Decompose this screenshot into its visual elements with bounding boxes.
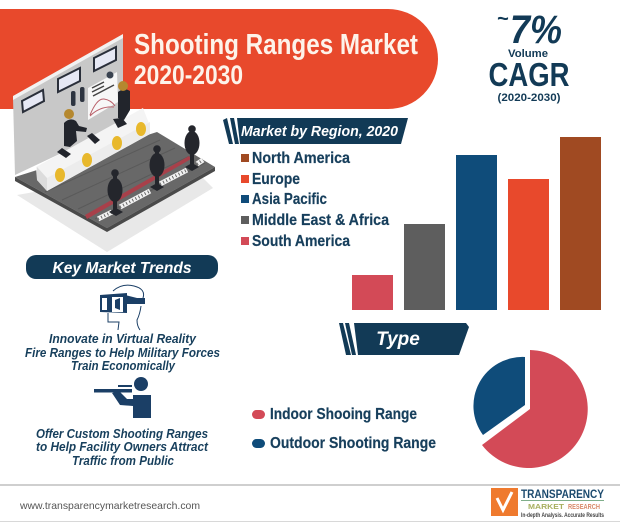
CAGR callout: 7% — [510, 8, 562, 52]
region legend: North America — [252, 150, 350, 167]
type legend — [252, 406, 436, 452]
footer rule — [0, 484, 620, 486]
type legend: Indoor Shooing Range — [270, 406, 417, 423]
text: virtual reality trend: Train Economically — [71, 359, 176, 373]
region legend: South America — [252, 233, 350, 250]
logo: transparency market research: RESEARCH — [568, 502, 600, 511]
CAGR callout: Volume — [508, 48, 548, 60]
title: Shooting Ranges Market — [134, 29, 418, 61]
CAGR callout: CAGR — [488, 56, 570, 93]
type legend: Outdoor Shooting Range — [270, 435, 436, 452]
CAGR callout — [488, 8, 570, 104]
region legend: Asia Pacific — [252, 191, 327, 208]
icon: VR headset — [100, 285, 145, 330]
logo: transparency market research: In-depth Analysis. Accurate Results — [521, 513, 605, 519]
icon: shooter with rifle — [94, 377, 151, 418]
region legend: Europe — [252, 171, 300, 188]
CAGR callout: (2020-2030) — [498, 92, 561, 104]
text: custom ranges trend: Traffic from Public — [72, 454, 174, 468]
text: custom ranges trend: Offer Custom Shooting Ranges — [36, 427, 208, 441]
illustration: shooting range — [13, 34, 215, 252]
text: custom ranges trend: to Help Facility Owners Attract — [36, 440, 209, 454]
heading: market by region — [223, 118, 408, 144]
text: virtual reality trend — [25, 332, 220, 373]
logo: transparency market research — [491, 487, 605, 519]
region legend — [241, 150, 389, 250]
text: virtual reality trend: Innovate in Virtual Reality — [49, 332, 197, 346]
title — [134, 29, 418, 90]
region legend: Middle East & Africa — [252, 212, 389, 229]
CAGR callout: ~ — [497, 8, 509, 30]
heading: type — [339, 323, 469, 355]
website url: www.transparencymarketresearch.com — [19, 500, 200, 512]
heading: market by region: Market by Region, 2020 — [241, 123, 399, 140]
title banner — [0, 9, 438, 109]
heading: type: Type — [376, 329, 420, 350]
bar chart: market by region — [352, 137, 601, 310]
text: virtual reality trend: Fire Ranges to Help Military Forces — [25, 346, 220, 360]
logo: transparency market research: MARKET — [528, 502, 564, 511]
logo: transparency market research: TRANSPARENCY — [521, 487, 604, 501]
heading: key market trends: Key Market Trends — [52, 260, 192, 277]
heading: key market trends — [26, 255, 218, 279]
text: custom ranges trend — [36, 427, 209, 468]
title: 2020-2030 — [134, 60, 243, 90]
pie chart: type — [473, 350, 588, 468]
